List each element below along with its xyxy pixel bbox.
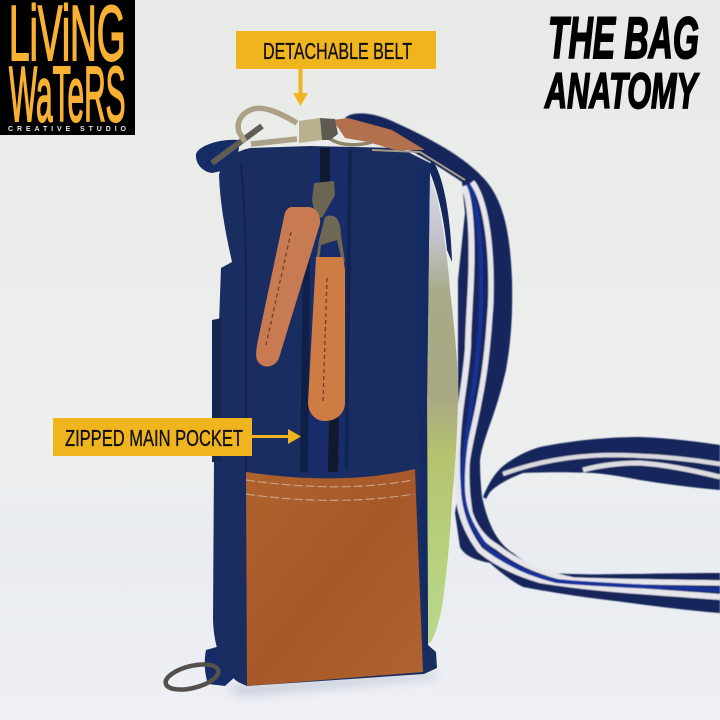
callout: detachable belt [236, 31, 436, 106]
bag body [212, 146, 437, 686]
gusset dark side [300, 258, 310, 472]
arrow: down to belt hook [293, 69, 308, 106]
zip slider: left [312, 181, 335, 218]
logo subtitle: CREATIVE STUDIO [8, 126, 127, 133]
label box [53, 418, 252, 456]
zip slider: right [316, 216, 345, 262]
label text: ZIPPED MAIN POCKET [65, 425, 243, 451]
strap edge line [372, 150, 465, 180]
shoulder strap [345, 113, 720, 613]
centre zip gusset [307, 148, 352, 475]
logo wordmark: Waters: WaTeRS [9, 50, 126, 138]
metal loop [324, 132, 372, 145]
snap hook [238, 108, 297, 144]
title [544, 5, 700, 119]
label box [236, 31, 436, 69]
canvas shell [213, 146, 437, 686]
bottom strap loop [205, 646, 236, 686]
tab stitching [266, 232, 327, 402]
detachable belt hardware [212, 108, 465, 180]
hook block [299, 118, 322, 143]
label text: DETACHABLE BELT [263, 38, 412, 64]
right binding [415, 163, 430, 650]
arrow: right to zip [252, 429, 301, 444]
gunmetal ring [212, 126, 262, 163]
bottom metal ring [163, 660, 221, 694]
leather strap end [333, 118, 425, 150]
left pocket seam shadow [212, 318, 222, 462]
logo [0, 0, 135, 138]
callout: zipped main pocket [53, 418, 301, 456]
right gusset seam [345, 150, 352, 470]
strap: rear loop [483, 437, 720, 499]
swivel [320, 118, 338, 140]
logo background [0, 0, 135, 135]
leather tab: right [308, 257, 345, 421]
leather base pocket [246, 469, 423, 686]
zip teeth [325, 148, 334, 472]
ground shadow [225, 672, 440, 696]
zipper pulls [256, 181, 345, 421]
leather tab: left [256, 207, 320, 367]
side gusset dark seam [241, 165, 246, 472]
transparent window panel [420, 168, 458, 645]
strap: main band [345, 113, 720, 613]
top-left strap loop [196, 140, 240, 173]
rear strap edge behind window [428, 160, 452, 262]
stitching [246, 480, 414, 500]
